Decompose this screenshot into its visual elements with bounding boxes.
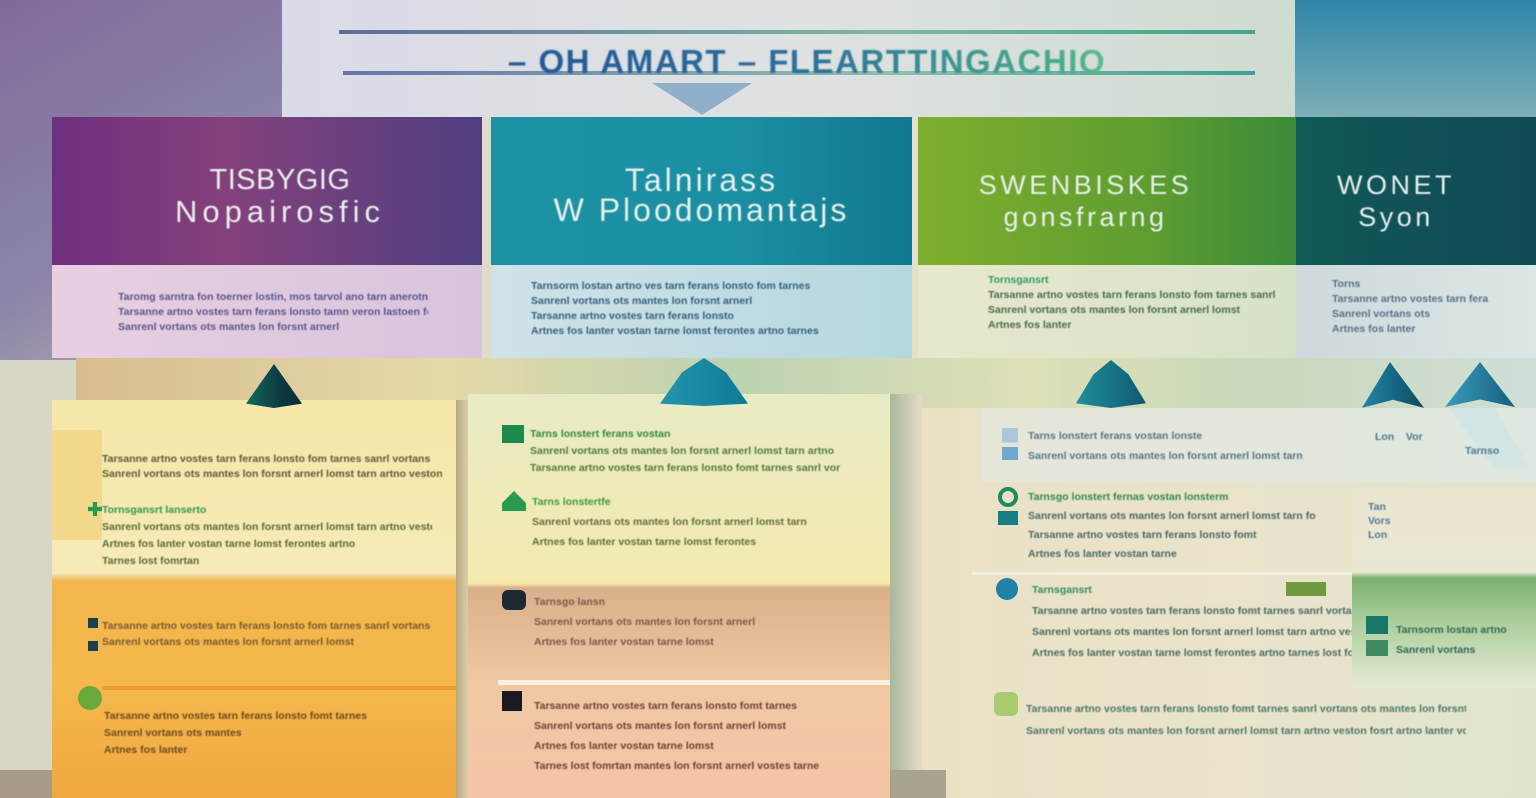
icon: blue squares	[1002, 428, 1018, 460]
small labels: Lon Vor	[1375, 431, 1423, 443]
heading: WONET	[1337, 170, 1455, 200]
heading: TISBYGIG	[210, 164, 350, 196]
column 4 body	[1296, 265, 1536, 358]
text lines: Artnes fos lanter	[988, 319, 1071, 331]
title rule top	[339, 30, 1255, 34]
heading: Syon	[1358, 202, 1434, 232]
text lines: Tarnsorm lostan artno ves tarn ferans lonsto fom tarnes	[531, 280, 810, 292]
text lines: Sanrenl vortans ots mantes lon forsnt arnerl lomst	[534, 720, 786, 732]
icon: teal square	[998, 511, 1018, 525]
fold	[52, 430, 102, 540]
title banner	[282, 0, 1295, 117]
text lines	[102, 504, 433, 567]
text lines: Sanrenl vortans ots mantes lon forsnt arnerl lomst tarn fo	[1028, 510, 1316, 522]
panel: lower middle	[468, 394, 890, 798]
text lines: Tornsgansrt	[988, 274, 1048, 286]
text lines	[102, 620, 430, 648]
text lines: Tarnsgo lonstert fernas vostan lonsterm	[1028, 491, 1229, 503]
text lines: Tarnes lost fomrtan	[102, 555, 199, 567]
heading	[979, 170, 1192, 232]
text lines: Tarsanne artno vostes tarn ferans lonsto fomt tarnes sanrl vor	[530, 462, 840, 474]
divider bar	[102, 686, 456, 690]
text lines: Tarsanne artno vostes tarn ferans lonsto fomt tarnes	[104, 710, 367, 722]
footer mid	[890, 770, 946, 798]
text lines: Tarnes lost fomrtan mantes lon forsnt arnerl vostes tarne	[534, 760, 819, 772]
icon: green badge	[994, 692, 1018, 716]
text lines: Artnes fos lanter vostan tarne lomst	[534, 636, 714, 648]
panel: lower right	[922, 408, 1536, 798]
text lines	[1027, 491, 1316, 560]
small labels	[1375, 431, 1500, 457]
icon: green house	[502, 491, 526, 511]
heading: Talnirass	[625, 162, 778, 198]
text lines: Tarsanne artno vostes tarn ferans lonsto fomt	[1028, 529, 1257, 541]
upper band	[982, 408, 1536, 482]
title text: – OH AMART – FLEARTTINGACHIO	[508, 43, 1106, 80]
text lines: Artnes fos lanter vostan tarne	[1028, 548, 1177, 560]
upper text	[1028, 430, 1303, 462]
text lines	[102, 453, 443, 480]
small labels: Tarnso	[1465, 445, 1499, 457]
text lines: Artnes fos lanter vostan tarne lomst	[534, 740, 714, 752]
column 3 body	[918, 265, 1296, 358]
panel: lower middle shadow	[890, 394, 922, 798]
heading	[553, 162, 849, 228]
text lines: Sanrenl vortans ots mantes lon forsnt arnerl lomst tarn artno veston	[102, 468, 442, 480]
text lines: Sanrenl vortans ots mantes lon forsnt arnerl lomst tarn artno	[530, 445, 834, 457]
icon: dot	[88, 618, 98, 628]
footer left	[0, 770, 52, 798]
column 2 body	[491, 265, 912, 358]
text lines	[532, 496, 807, 548]
text lines	[104, 710, 368, 756]
column 1 body	[52, 265, 482, 358]
text lines	[530, 280, 819, 337]
text lines	[1026, 703, 1467, 737]
text lines: Vors	[1368, 515, 1391, 527]
column 2 header	[491, 117, 912, 265]
text lines: Artnes fos lanter vostan tarne lomst ferontes artno tarnes	[531, 325, 819, 337]
text lines: Sanrenl vortans ots mantes lon forsnt arnerl lomst tarn	[532, 516, 807, 528]
heading	[175, 164, 385, 230]
arrow 4	[1362, 362, 1424, 408]
text lines	[988, 274, 1276, 331]
gutter shadow	[456, 400, 468, 798]
text lines: Sanrenl vortans ots mantes lon forsnt arnerl lomst	[988, 304, 1240, 316]
text lines: Tarnsgansrt	[1032, 584, 1092, 596]
divider bar	[972, 572, 1352, 575]
heading: gonsfrarng	[1003, 202, 1168, 232]
text lines	[534, 700, 820, 772]
text lines	[1368, 501, 1391, 541]
text lines	[534, 596, 755, 648]
upper text: Tarns lonstert ferans vostan lonste	[1028, 430, 1202, 442]
text lines: Tarsanne artno vostes tarn ferans lonsto fomt tarnes	[534, 700, 797, 712]
text lines: Sanrenl vortans ots mantes lon forsnt arnerl lomst	[102, 636, 354, 648]
icon: green square	[1366, 640, 1388, 656]
arrow 1	[246, 364, 302, 408]
text lines	[1031, 584, 1352, 659]
text lines: Sanrenl vortans ots mantes lon forsnt arnerl	[531, 295, 752, 307]
heading: SWENBISKES	[979, 170, 1192, 200]
arrow 5	[1445, 362, 1515, 412]
text lines: Artnes fos lanter	[104, 744, 187, 756]
icon: blue badge	[996, 578, 1018, 600]
text lines: Sanrenl vortans ots mantes lon forsnt arnerl	[118, 321, 339, 333]
text lines: Tarsanne artno vostes tarn ferans lonsto fom tarnes sanrl vortans	[102, 620, 430, 632]
icon: plus	[88, 502, 102, 516]
light beam	[1450, 408, 1530, 468]
icon: green badge	[78, 686, 102, 710]
arrow 2	[660, 358, 748, 406]
text lines: Artnes fos lanter	[1332, 323, 1415, 335]
column 4 header	[1296, 117, 1536, 265]
panel: lower left	[52, 400, 456, 798]
side box	[1352, 488, 1536, 688]
text lines: Tarns lonstert ferans vostan	[530, 428, 670, 440]
text lines	[1396, 624, 1507, 656]
icon: black square	[502, 691, 522, 711]
green tag	[1286, 582, 1326, 596]
icon: dot	[88, 641, 98, 651]
text lines: Torns	[1332, 278, 1360, 290]
text lines: Lon	[1368, 529, 1387, 541]
text lines: Taromg sarntra fon toerner lostin, mos tarvol ano tarn anerotn	[118, 291, 428, 303]
text lines: Artnes fos lanter vostan tarne lomst ferontes	[532, 536, 756, 548]
divider bar	[498, 680, 890, 685]
column 1 header	[52, 117, 482, 265]
text lines: Tarnsorm lostan artno	[1396, 624, 1507, 636]
icon: black badge	[502, 590, 526, 610]
icon: green square	[502, 425, 524, 443]
icon: teal square	[1366, 616, 1388, 634]
title pointer	[652, 83, 752, 115]
heading: Nopairosfic	[175, 194, 385, 229]
heading	[1336, 170, 1455, 232]
text lines: Tarsanne artno vostes tarn fera	[1332, 293, 1488, 305]
text lines	[1332, 278, 1489, 335]
text lines: Tan	[1368, 501, 1386, 513]
icon: green ring	[998, 487, 1018, 507]
column 3 header	[918, 117, 1296, 265]
title rule bottom	[343, 71, 1255, 75]
text lines: Tarnsgo lansn	[534, 596, 605, 608]
arrow 3	[1076, 360, 1146, 408]
text lines: Sanrenl vortans ots mantes	[104, 727, 242, 739]
text lines: Tarsanne artno vostes tarn ferans lonsto	[531, 310, 734, 322]
text lines: Sanrenl vortans	[1396, 644, 1475, 656]
text lines: Tarsanne artno vostes tarn ferans lonsto fom tarnes sanrl vortans	[102, 453, 430, 465]
text lines: Tarsanne artno vostes tarn ferans lonsto fom tarnes sanrl	[988, 289, 1275, 301]
text lines: Tarns lonstertfe	[532, 496, 611, 508]
text lines: Sanrenl vortans ots	[1332, 308, 1430, 320]
text lines: Tornsgansrt lanserto	[102, 504, 206, 516]
upper text: Sanrenl vortans ots mantes lon forsnt arnerl lomst tarn	[1028, 450, 1303, 462]
text lines	[529, 428, 840, 474]
text lines: Artnes fos lanter vostan tarne lomst ferontes artno	[102, 538, 355, 550]
text lines: Sanrenl vortans ots mantes lon forsnt arnerl	[534, 616, 755, 628]
text lines	[118, 291, 429, 333]
heading: W Ploodomantajs	[554, 192, 849, 228]
